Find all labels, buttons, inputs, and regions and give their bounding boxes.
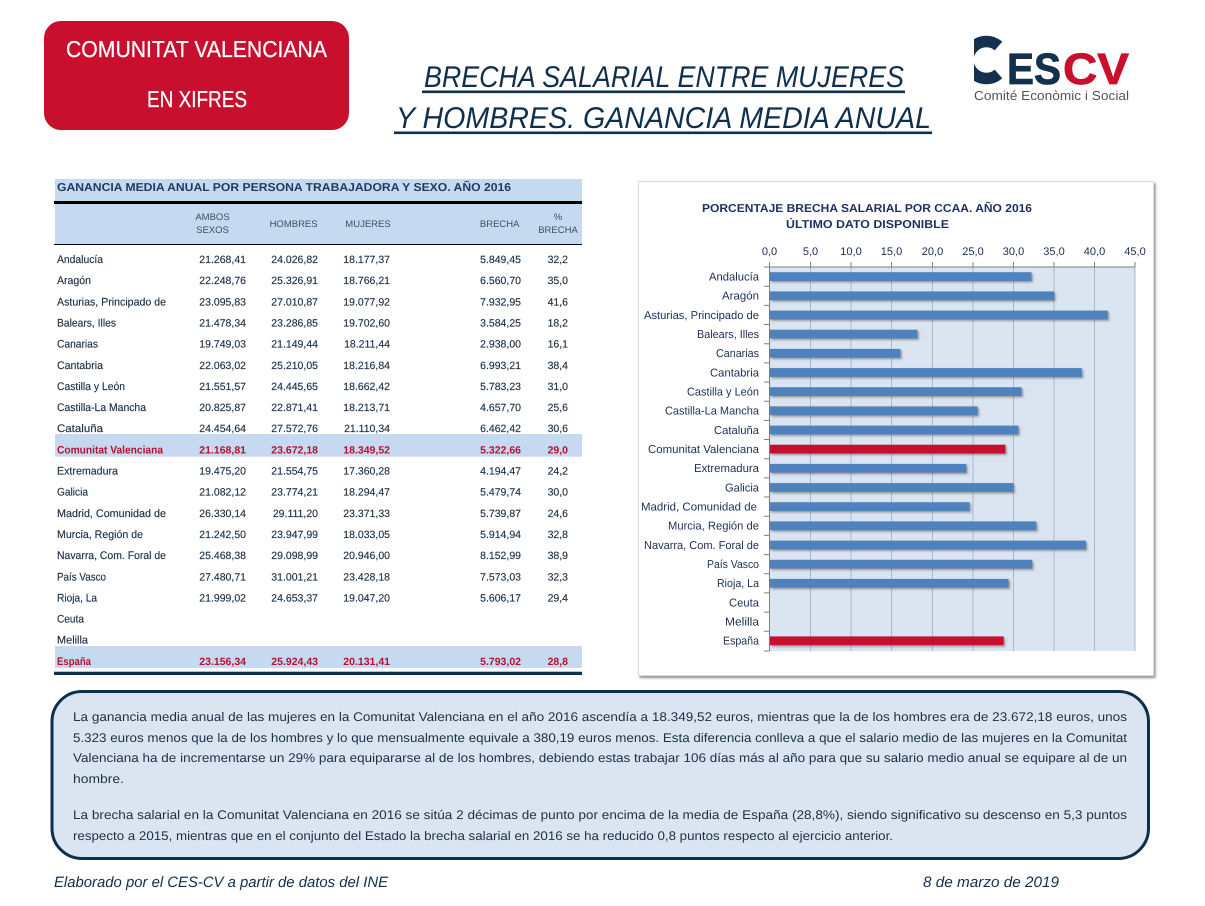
x axis labels: 15,0 [881, 246, 902, 258]
category labels: Castilla-La Mancha [665, 406, 760, 418]
row: Andalucía: 21.268,41 [199, 254, 246, 266]
row: Canarias: 16,1 [548, 339, 568, 351]
x axis labels: 40,0 [1084, 246, 1105, 258]
row: Murcia: 5.914,94 [480, 529, 521, 541]
row: Cantabria: 25.210,05 [271, 360, 318, 372]
x axis labels: 35,0 [1043, 246, 1065, 258]
badge: Comunitat Valenciana en xifres: EN XIFRES [147, 86, 247, 112]
table column headers: MUJERES [345, 219, 391, 230]
row: Extremadura [57, 466, 568, 478]
row: Asturias: 41,6 [548, 296, 568, 308]
row: Aragón: 35,0 [548, 275, 568, 287]
row: Balears: 19.702,60 [343, 318, 390, 330]
panel: commentary text [52, 692, 1148, 858]
x axis labels: 0,0 [762, 246, 777, 258]
x axis labels: 45,0 [1124, 246, 1146, 258]
x axis labels: 20,0 [922, 246, 943, 258]
category labels: Andalucía [709, 271, 760, 283]
category labels: Asturias, Principado de [644, 310, 759, 322]
paragraph 2 [73, 808, 1127, 843]
category labels: Murcia, Región de [668, 521, 759, 533]
row: Cantabria: Cantabria [57, 360, 104, 372]
category labels: Galicia [725, 482, 760, 494]
category labels: Navarra, Com. Foral de [644, 540, 759, 552]
category labels: Aragón [722, 291, 759, 303]
row: Andalucía: 24.026,82 [271, 254, 318, 266]
row: Cantabria [57, 360, 568, 372]
row: Navarra: 29.098,99 [271, 550, 318, 562]
row: Aragón: 18.766,21 [343, 275, 390, 287]
badge: Comunitat Valenciana en xifres [44, 21, 349, 130]
row highlight: España: 20.131,41 [343, 656, 390, 668]
logo: CESCV: CV [1063, 45, 1130, 94]
row: País Vasco: 31.001,21 [271, 571, 318, 583]
row: Rioja [57, 592, 568, 604]
row: Cataluña: 6.462,42 [480, 423, 521, 435]
chart title: PORCENTAJE BRECHA SALARIAL POR CCAA. AÑO 2016 [702, 201, 1032, 215]
x axis labels: 25,0 [962, 246, 984, 258]
table title: GANANCIA MEDIA ANUAL POR PERSONA TRABAJADORA Y SEXO. AÑO 2016 [57, 180, 511, 194]
logo: CESCV [968, 41, 1130, 103]
row: Navarra: 8.152,99 [480, 550, 521, 562]
table column headers: BRECHA [538, 225, 578, 236]
row: Murcia: 18.033,05 [343, 529, 390, 541]
paragraph 1: 5.323 euros menos que la de los hombres y lo que mensualmente equivale a 380,19 euros menos. Esta diferencia conlleva a que el salario medio de las mujeres en la Comunitat [73, 731, 1128, 745]
row: Balears: 23.286,85 [271, 318, 318, 330]
row highlight: Comunitat Valenciana: 5.322,66 [480, 444, 521, 456]
row: Cantabria: 18.216,84 [343, 360, 390, 372]
row: Navarra: 38,9 [548, 550, 568, 562]
row: Cataluña: 21.110,34 [344, 423, 390, 435]
row: Rioja: 29,4 [548, 592, 568, 604]
row: Castilla-La Mancha: 20.825,87 [199, 402, 246, 414]
title: Y HOMBRES. GANANCIA MEDIA ANUAL [396, 102, 931, 135]
row: País Vasco: País Vasco [57, 571, 106, 583]
row highlight: Comunitat Valenciana: 23.672,18 [271, 444, 318, 456]
row: Castilla-La Mancha: 22.871,41 [271, 402, 318, 414]
x axis labels: 10,0 [840, 246, 862, 258]
title: BRECHA SALARIAL ENTRE MUJERES [424, 61, 904, 94]
row: Balears: 21.478,34 [199, 318, 246, 330]
category labels: Extremadura [694, 463, 760, 475]
category labels: Cataluña [714, 425, 760, 437]
category labels: España [723, 636, 760, 648]
row: Asturias: 19.077,92 [343, 296, 390, 308]
row: Madrid: 26.330,14 [199, 508, 246, 520]
x axis labels: 30,0 [1003, 246, 1024, 258]
category labels: Ceuta [729, 597, 760, 609]
category labels: Cantabria [710, 367, 760, 379]
row: Cantabria: 38,4 [548, 360, 568, 372]
badge: Comunitat Valenciana en xifres: COMUNITAT VALENCIANA [66, 36, 328, 62]
logo: CESCV: Comité Econòmic i Social [974, 88, 1129, 103]
row highlight: España: España [57, 656, 92, 668]
category labels: Madrid, Comunidad de [641, 501, 757, 513]
chart title [702, 201, 1032, 231]
paragraph 1: hombre. [73, 772, 124, 786]
row: Andalucía: 5.849,45 [480, 254, 521, 266]
row: Andalucía: Andalucía [57, 254, 104, 266]
row: Murcia: Murcia, Región de [57, 529, 143, 541]
row: Castilla-La Mancha [57, 402, 568, 414]
row: Murcia: 32,8 [548, 529, 568, 541]
row: Extremadura: 21.554,75 [271, 466, 318, 478]
row highlight: Comunitat Valenciana: 29,0 [548, 444, 568, 456]
row highlight: España: 5.793,02 [480, 656, 521, 668]
row: Galicia: 21.082,12 [199, 487, 246, 499]
row: Extremadura: 19.475,20 [199, 466, 246, 478]
row: Cataluña: Cataluña [57, 423, 104, 435]
row: Castilla y León [57, 381, 568, 393]
category labels: País Vasco [707, 559, 759, 571]
row: Murcia [57, 529, 568, 541]
row highlight: España: 25.924,43 [271, 656, 318, 668]
chart title: ÚLTIMO DATO DISPONIBLE [786, 217, 949, 231]
row: Madrid: 23.371,33 [343, 508, 390, 520]
row: Navarra: Navarra, Com. Foral de [57, 550, 166, 562]
row: Galicia: Galicia [57, 487, 89, 499]
table column headers: HOMBRES [270, 219, 318, 230]
row: Canarias: 21.149,44 [271, 339, 318, 351]
row: Aragón [57, 275, 568, 287]
category labels: Balears, Illes [697, 329, 759, 341]
x axis labels: 5,0 [803, 246, 818, 258]
row: Rioja: 19.047,20 [343, 592, 390, 604]
row: Madrid: 5.739,87 [480, 508, 521, 520]
row: Aragón: 22.248,76 [199, 275, 246, 287]
row: Melilla: Melilla [57, 635, 89, 647]
bars [770, 272, 1108, 645]
row: Castilla y León: 18.662,42 [343, 381, 390, 393]
category labels [641, 271, 760, 648]
row: Castilla y León: 21.551,57 [199, 381, 246, 393]
row: Cataluña: 30,6 [548, 423, 568, 435]
row highlight: España [54, 646, 582, 675]
row: Extremadura: Extremadura [57, 466, 119, 478]
plot area [764, 262, 1135, 651]
row: País Vasco: 32,3 [548, 571, 568, 583]
row: Murcia: 23.947,99 [271, 529, 318, 541]
row: Rioja: 24.653,37 [271, 592, 318, 604]
x axis labels [762, 246, 1146, 258]
row: Galicia: 5.479,74 [480, 487, 521, 499]
row: Ceuta: Ceuta [57, 614, 85, 626]
row: Canarias: 18.211,44 [344, 339, 390, 351]
row: Galicia [57, 487, 568, 499]
row: Murcia: 21.242,50 [199, 529, 246, 541]
paragraph 1: Valenciana ha de incrementarse un 29% para equipararse al de los hombres, debiendo estas trabajar 106 días más al año para que su salario medio anual se equipare al de un [73, 751, 1127, 765]
row: País Vasco: 23.428,18 [343, 571, 390, 583]
paragraph 1 [73, 710, 1128, 786]
table column headers [54, 201, 582, 245]
row: Navarra: 25.468,38 [199, 550, 246, 562]
row: Canarias: 2.938,00 [480, 339, 521, 351]
row highlight: España: 23.156,34 [199, 656, 246, 668]
row: Castilla y León: 31,0 [548, 381, 568, 393]
row: Aragón: Aragón [57, 275, 91, 287]
row: Galicia: 18.294,47 [343, 487, 390, 499]
row: Cataluña: 24.454,64 [199, 423, 246, 435]
row: Balears: 18,2 [548, 318, 568, 330]
category labels: Castilla y León [687, 386, 759, 398]
row: Madrid: Madrid, Comunidad de [57, 508, 166, 520]
row: Andalucía [57, 254, 568, 266]
row: Asturias: Asturias, Principado de [57, 296, 166, 308]
row highlight: Comunitat Valenciana: 18.349,52 [343, 444, 390, 456]
row: Galicia: 23.774,21 [271, 487, 318, 499]
row: Andalucía: 18.177,37 [343, 254, 390, 266]
row: Canarias: 19.749,03 [199, 339, 246, 351]
paragraph 2: La brecha salarial en la Comunitat Valenciana en 2016 se sitúa 2 décimas de punto por encima de la media de España (28,8%), siendo significativo su descenso en 5,3 puntos [73, 808, 1127, 822]
row: Extremadura: 17.360,28 [343, 466, 390, 478]
row: Madrid: 24,6 [548, 508, 568, 520]
paragraph 2: respecto a 2015, mientras que en el conjunto del Estado la brecha salarial en 2016 se ha reducido 0,8 puntos respecto al ejercicio anterior. [73, 829, 893, 843]
category labels: Rioja, La [717, 578, 760, 590]
row: Canarias [57, 339, 568, 351]
row: Castilla-La Mancha: 4.657,70 [480, 402, 521, 414]
paragraph 1: La ganancia media anual de las mujeres en la Comunitat Valenciana en el año 2016 ascendía a 18.349,52 euros, mientras que la de los hombres era de 23.672,18 euros, unos [73, 710, 1127, 724]
row: Cataluña: 27.572,76 [271, 423, 318, 435]
row: Castilla-La Mancha: Castilla-La Mancha [57, 402, 147, 414]
row: Extremadura: 24,2 [548, 466, 568, 478]
row: Castilla y León: Castilla y León [57, 381, 125, 393]
row: Galicia: 30,0 [548, 487, 568, 499]
footer: date: 8 de marzo de 2019 [923, 874, 1060, 891]
row: Asturias: 7.932,95 [480, 296, 521, 308]
row highlight: Comunitat Valenciana: 21.168,81 [199, 444, 246, 456]
category labels: Canarias [716, 348, 759, 360]
row: Aragón: 25.326,91 [271, 275, 318, 287]
row: Asturias [57, 296, 568, 308]
footer: source: Elaborado por el CES-CV a partir de datos del INE [54, 874, 389, 891]
row: Extremadura: 4.194,47 [480, 466, 521, 478]
row: Balears [57, 318, 568, 330]
row: Navarra: 20.946,00 [343, 550, 390, 562]
table column headers: BRECHA [480, 219, 520, 230]
panel: bar chart [638, 182, 1154, 676]
row: Rioja: 5.606,17 [480, 592, 521, 604]
row: Castilla y León: 5.783,23 [480, 381, 521, 393]
row highlight: Comunitat Valenciana: Comunitat Valenciana [57, 444, 164, 456]
title [394, 61, 932, 135]
row: Aragón: 6.560,70 [480, 275, 521, 287]
row: Castilla y León: 24.445,65 [271, 381, 318, 393]
table title [55, 179, 582, 201]
row: Navarra [57, 550, 568, 562]
row: Canarias: Canarias [57, 339, 98, 351]
table column headers: % [554, 212, 563, 223]
row highlight: España: 28,8 [548, 656, 568, 668]
category labels: Comunitat Valenciana [648, 444, 760, 456]
row: Cantabria: 22.063,02 [199, 360, 246, 372]
row: Madrid [57, 508, 568, 520]
row: Rioja: 21.999,02 [199, 592, 246, 604]
row: Asturias: 27.010,87 [271, 296, 318, 308]
logo: CESCV: ES [1007, 45, 1061, 94]
table column headers: AMBOS [195, 212, 230, 223]
row: Asturias: 23.095,83 [199, 296, 246, 308]
table column headers: SEXOS [196, 225, 229, 236]
panel: data table [54, 179, 582, 675]
row: Balears: 3.584,25 [480, 318, 521, 330]
row: Castilla-La Mancha: 25,6 [548, 402, 568, 414]
row: Andalucía: 32,2 [548, 254, 568, 266]
row highlight: Comunitat Valenciana [55, 434, 582, 457]
row: País Vasco [57, 571, 568, 583]
category labels: Melilla [725, 616, 760, 628]
row: País Vasco: 27.480,71 [199, 571, 246, 583]
row: Cataluña [57, 423, 568, 435]
row: Balears: Balears, Illes [57, 318, 116, 330]
row: Rioja: Rioja, La [57, 592, 98, 604]
row: Castilla-La Mancha: 18.213,71 [343, 402, 390, 414]
row: Cantabria: 6.993,21 [480, 360, 521, 372]
row: Madrid: 29.111,20 [273, 508, 318, 520]
row: País Vasco: 7.573,03 [480, 571, 521, 583]
